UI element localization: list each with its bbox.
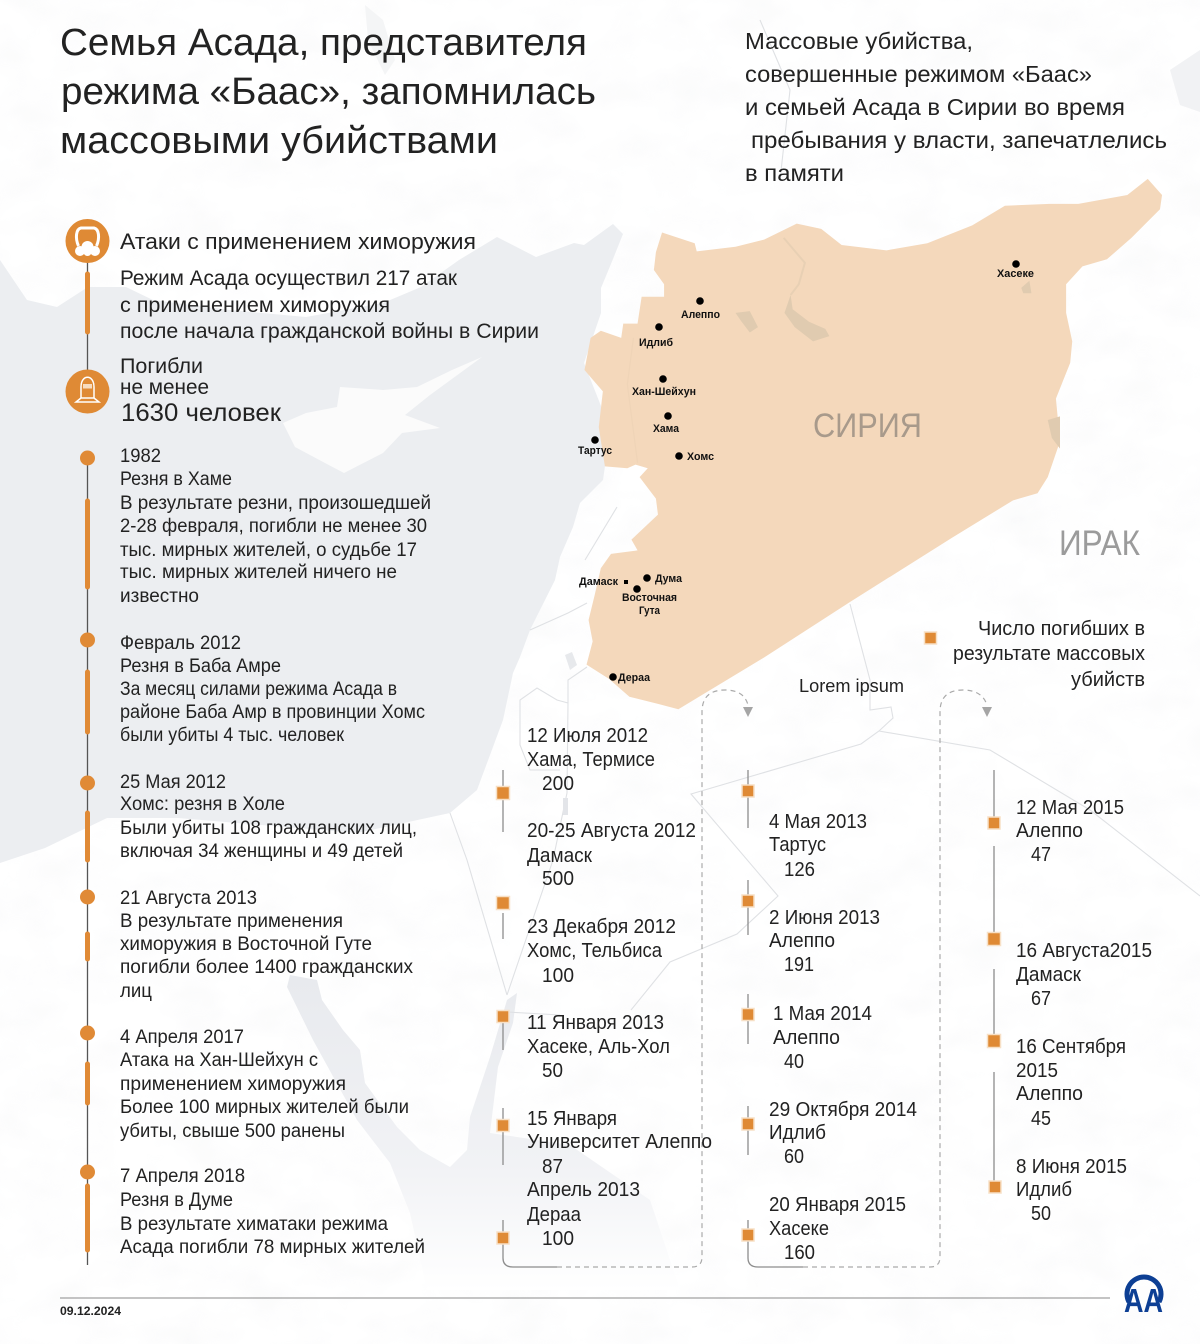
city markers (578, 260, 1034, 684)
casualty markers (496, 785, 1001, 1244)
left timeline line and bars (80, 262, 95, 1265)
massacre list: column 3: Идлиб (1016, 1179, 1072, 1201)
city markers: Алеппо (681, 309, 720, 321)
event: February 2012 (120, 633, 425, 746)
massacre list: column 3: 12 Мая 2015 (1016, 797, 1124, 819)
city markers: Дамаск (579, 576, 618, 588)
chemical attacks text (120, 267, 539, 343)
massacre list: column 2: 29 Октября 2014 (769, 1099, 917, 1121)
city markers: Идлиб (639, 337, 673, 349)
city markers: Гута (639, 605, 661, 617)
event: 1982: тыс. мирных жителей, о судьбе 17 (120, 540, 417, 561)
massacre list: column 2 (769, 811, 917, 1264)
chemical attacks text: после начала гражданской войны в Сирии (120, 320, 539, 343)
city markers: Хан-Шейхун (632, 386, 696, 398)
event: 21 August 2013: лиц (120, 981, 152, 1002)
massacre list: column 3: 45 (1031, 1108, 1051, 1130)
event: 25 May 2012: включая 34 женщины и 49 детей (120, 841, 403, 862)
event: 7 April 2018: В результате химатаки режима (120, 1214, 388, 1235)
event: 1982: известно (120, 586, 199, 607)
massacre list: column 3: 16 Августа2015 (1016, 940, 1152, 962)
massacre list: column 1: 20-25 Августа 2012 (527, 820, 696, 842)
event: 21 August 2013 (120, 888, 413, 1002)
city markers: Хама (653, 423, 680, 435)
date: 09.12.2024 (60, 1304, 121, 1318)
intro text: совершенные режимом «Баас» (745, 61, 1092, 87)
event: 1982 (120, 446, 431, 607)
event: February 2012: были убиты 4 тыс. человек (120, 725, 345, 746)
label: Iraq: ИРАК (1059, 524, 1141, 563)
death toll: 1630 человек (121, 399, 282, 427)
title: режима «Баас», запомнилась (61, 71, 596, 113)
event: 21 August 2013: 21 Августа 2013 (120, 888, 257, 909)
event: 1982: 1982 (120, 446, 161, 467)
intro text: Массовые убийства, (745, 28, 973, 54)
massacre list: column 3: 8 Июня 2015 (1016, 1156, 1127, 1178)
chemical attacks text: с применением химоружия (120, 294, 390, 317)
chemical attacks text: Режим Асада осуществил 217 атак (120, 267, 458, 290)
massacre list: column 3: 16 Сентября (1016, 1036, 1126, 1058)
massacre list: column 1: Хомс, Тельбиса (527, 940, 663, 962)
event: 1982: Резня в Хаме (120, 469, 232, 490)
massacre list: column 3: Алеппо (1016, 820, 1083, 842)
event: February 2012: Резня в Баба Амре (120, 656, 281, 677)
massacre list: column 2: 20 Января 2015 (769, 1194, 906, 1216)
intro text: пребывания у власти, запечатлелись (751, 127, 1167, 153)
massacre list: column 1: Дамаск (527, 845, 592, 867)
title: Семья Асада, представителя (60, 22, 587, 64)
massacre list: column 2: 2 Июня 2013 (769, 907, 880, 929)
massacre list: column 1: Дераа (527, 1204, 582, 1226)
massacre list: column 2: Тартус (769, 834, 826, 856)
massacre list: column 1: Университет Алеппо (527, 1131, 712, 1153)
event: 25 May 2012: 25 Мая 2012 (120, 772, 226, 793)
massacre list: column 3 (1016, 797, 1152, 1225)
title: массовыми убийствами (60, 120, 498, 162)
map: Cyprus (283, 357, 482, 473)
icon: tombstone (66, 370, 110, 414)
event: February 2012: Февраль 2012 (120, 633, 241, 654)
event: 1982: 2-28 февраля, погибли не менее 30 (120, 516, 427, 537)
massacre list: column 1: 12 Июля 2012 (527, 725, 648, 747)
event: 1982: В результате резни, произошедшей (120, 493, 431, 514)
legend: убийств (1071, 669, 1145, 691)
death toll: Погибли (120, 355, 203, 378)
event: 4 April 2017: убиты, свыше 500 ранены (120, 1121, 345, 1142)
massacre list: column 1 (527, 725, 712, 1250)
massacre list: column 2: 160 (784, 1242, 815, 1264)
event: 4 April 2017 (120, 1027, 409, 1142)
massacre list: column 3: Алеппо (1016, 1083, 1083, 1105)
legend: результате массовых (953, 643, 1145, 665)
intro text: и семьей Асада в Сирии во время (745, 94, 1125, 120)
label: Syria: СИРИЯ (813, 407, 922, 445)
event: February 2012: районе Баба Амр в провинции Хомс (120, 702, 425, 723)
footer rule (60, 1298, 1110, 1299)
massacre list: column 2: 60 (784, 1146, 804, 1168)
event: 7 April 2018: Резня в Думе (120, 1190, 233, 1211)
massacre list: column 2: Идлиб (769, 1122, 826, 1144)
massacre list: column 3: 67 (1031, 988, 1051, 1010)
event: 25 May 2012: Хомс: резня в Холе (120, 794, 285, 815)
death toll (120, 355, 282, 427)
event: 4 April 2017: 4 Апреля 2017 (120, 1027, 244, 1048)
massacre list: column 3: 47 (1031, 844, 1051, 866)
massacre list: column 3: 2015 (1016, 1060, 1058, 1082)
event: 7 April 2018: 7 Апреля 2018 (120, 1166, 245, 1187)
event: 21 August 2013: химоружия в Восточной Гуте (120, 934, 372, 955)
logo: AA: AA (1124, 1282, 1163, 1319)
event: 4 April 2017: применением химоружия (120, 1074, 346, 1095)
legend: Число погибших в (978, 618, 1145, 640)
massacre list: column 2: Алеппо (773, 1027, 840, 1049)
massacre list: column 1: 50 (542, 1060, 563, 1082)
massacre list: column 1: 15 Января (527, 1108, 617, 1130)
event: 4 April 2017: Более 100 мирных жителей были (120, 1097, 409, 1118)
event: 25 May 2012 (120, 772, 417, 862)
event: 7 April 2018: Асада погибли 78 мирных жителей (120, 1237, 425, 1258)
massacre list: column 2: 126 (784, 859, 815, 881)
massacre list: column 1: 500 (542, 868, 574, 890)
massacre list: column 1: 100 (542, 1228, 574, 1250)
event: 21 August 2013: В результате применения (120, 911, 343, 932)
event: 1982: тыс. мирных жителей ничего не (120, 562, 397, 583)
massacre list: column 3: 50 (1031, 1203, 1051, 1225)
massacre list: column 2: 191 (784, 954, 814, 976)
intro text (745, 28, 1167, 186)
chemical attacks heading: Атаки с применением химоружия (120, 229, 476, 254)
city markers: Дераа (618, 672, 651, 684)
massacre list: column 1: Хама, Термисе (527, 749, 655, 771)
massacre list: column 1: 87 (542, 1156, 563, 1178)
city markers: Восточная (622, 592, 677, 604)
event: 25 May 2012: Были убиты 108 гражданских лиц, (120, 818, 417, 839)
massacre list: column 1: 23 Декабря 2012 (527, 916, 676, 938)
massacre list: column 2: Алеппо (769, 930, 835, 952)
placeholder caption: Lorem ipsum (799, 676, 904, 696)
city markers: Хасеке (997, 268, 1034, 280)
city markers: Хомс (687, 451, 714, 463)
event: 7 April 2018 (120, 1166, 425, 1258)
event: 4 April 2017: Атака на Хан-Шейхун с (120, 1050, 318, 1071)
massacre list: column 1: 100 (542, 965, 574, 987)
city markers: Тартус (578, 445, 612, 457)
icon: gas mask (66, 219, 110, 263)
city markers: Дума (655, 573, 683, 585)
massacre list: column 2: 4 Мая 2013 (769, 811, 867, 833)
massacre list: column 1: Апрель 2013 (527, 1179, 640, 1201)
massacre list: column 1: 200 (542, 773, 574, 795)
event: February 2012: За месяц силами режима Асада в (120, 679, 397, 700)
massacre list: column 1: Хасеке, Аль-Хол (527, 1036, 670, 1058)
massacre list: column 2: Хасеке (769, 1218, 829, 1240)
death toll: не менее (120, 376, 209, 399)
massacre list: column 2: 1 Мая 2014 (773, 1003, 872, 1025)
massacre list: column 2: 40 (784, 1051, 804, 1073)
intro text: в памяти (745, 160, 844, 186)
title (60, 22, 596, 162)
massacre list: column 3: Дамаск (1016, 964, 1081, 986)
map: Syria (584, 179, 1162, 709)
massacre list: column 1: 11 Января 2013 (527, 1012, 664, 1034)
massacre columns connectors (503, 690, 994, 1267)
legend (924, 618, 1145, 691)
event: 21 August 2013: погибли более 1400 гражданских (120, 957, 413, 978)
